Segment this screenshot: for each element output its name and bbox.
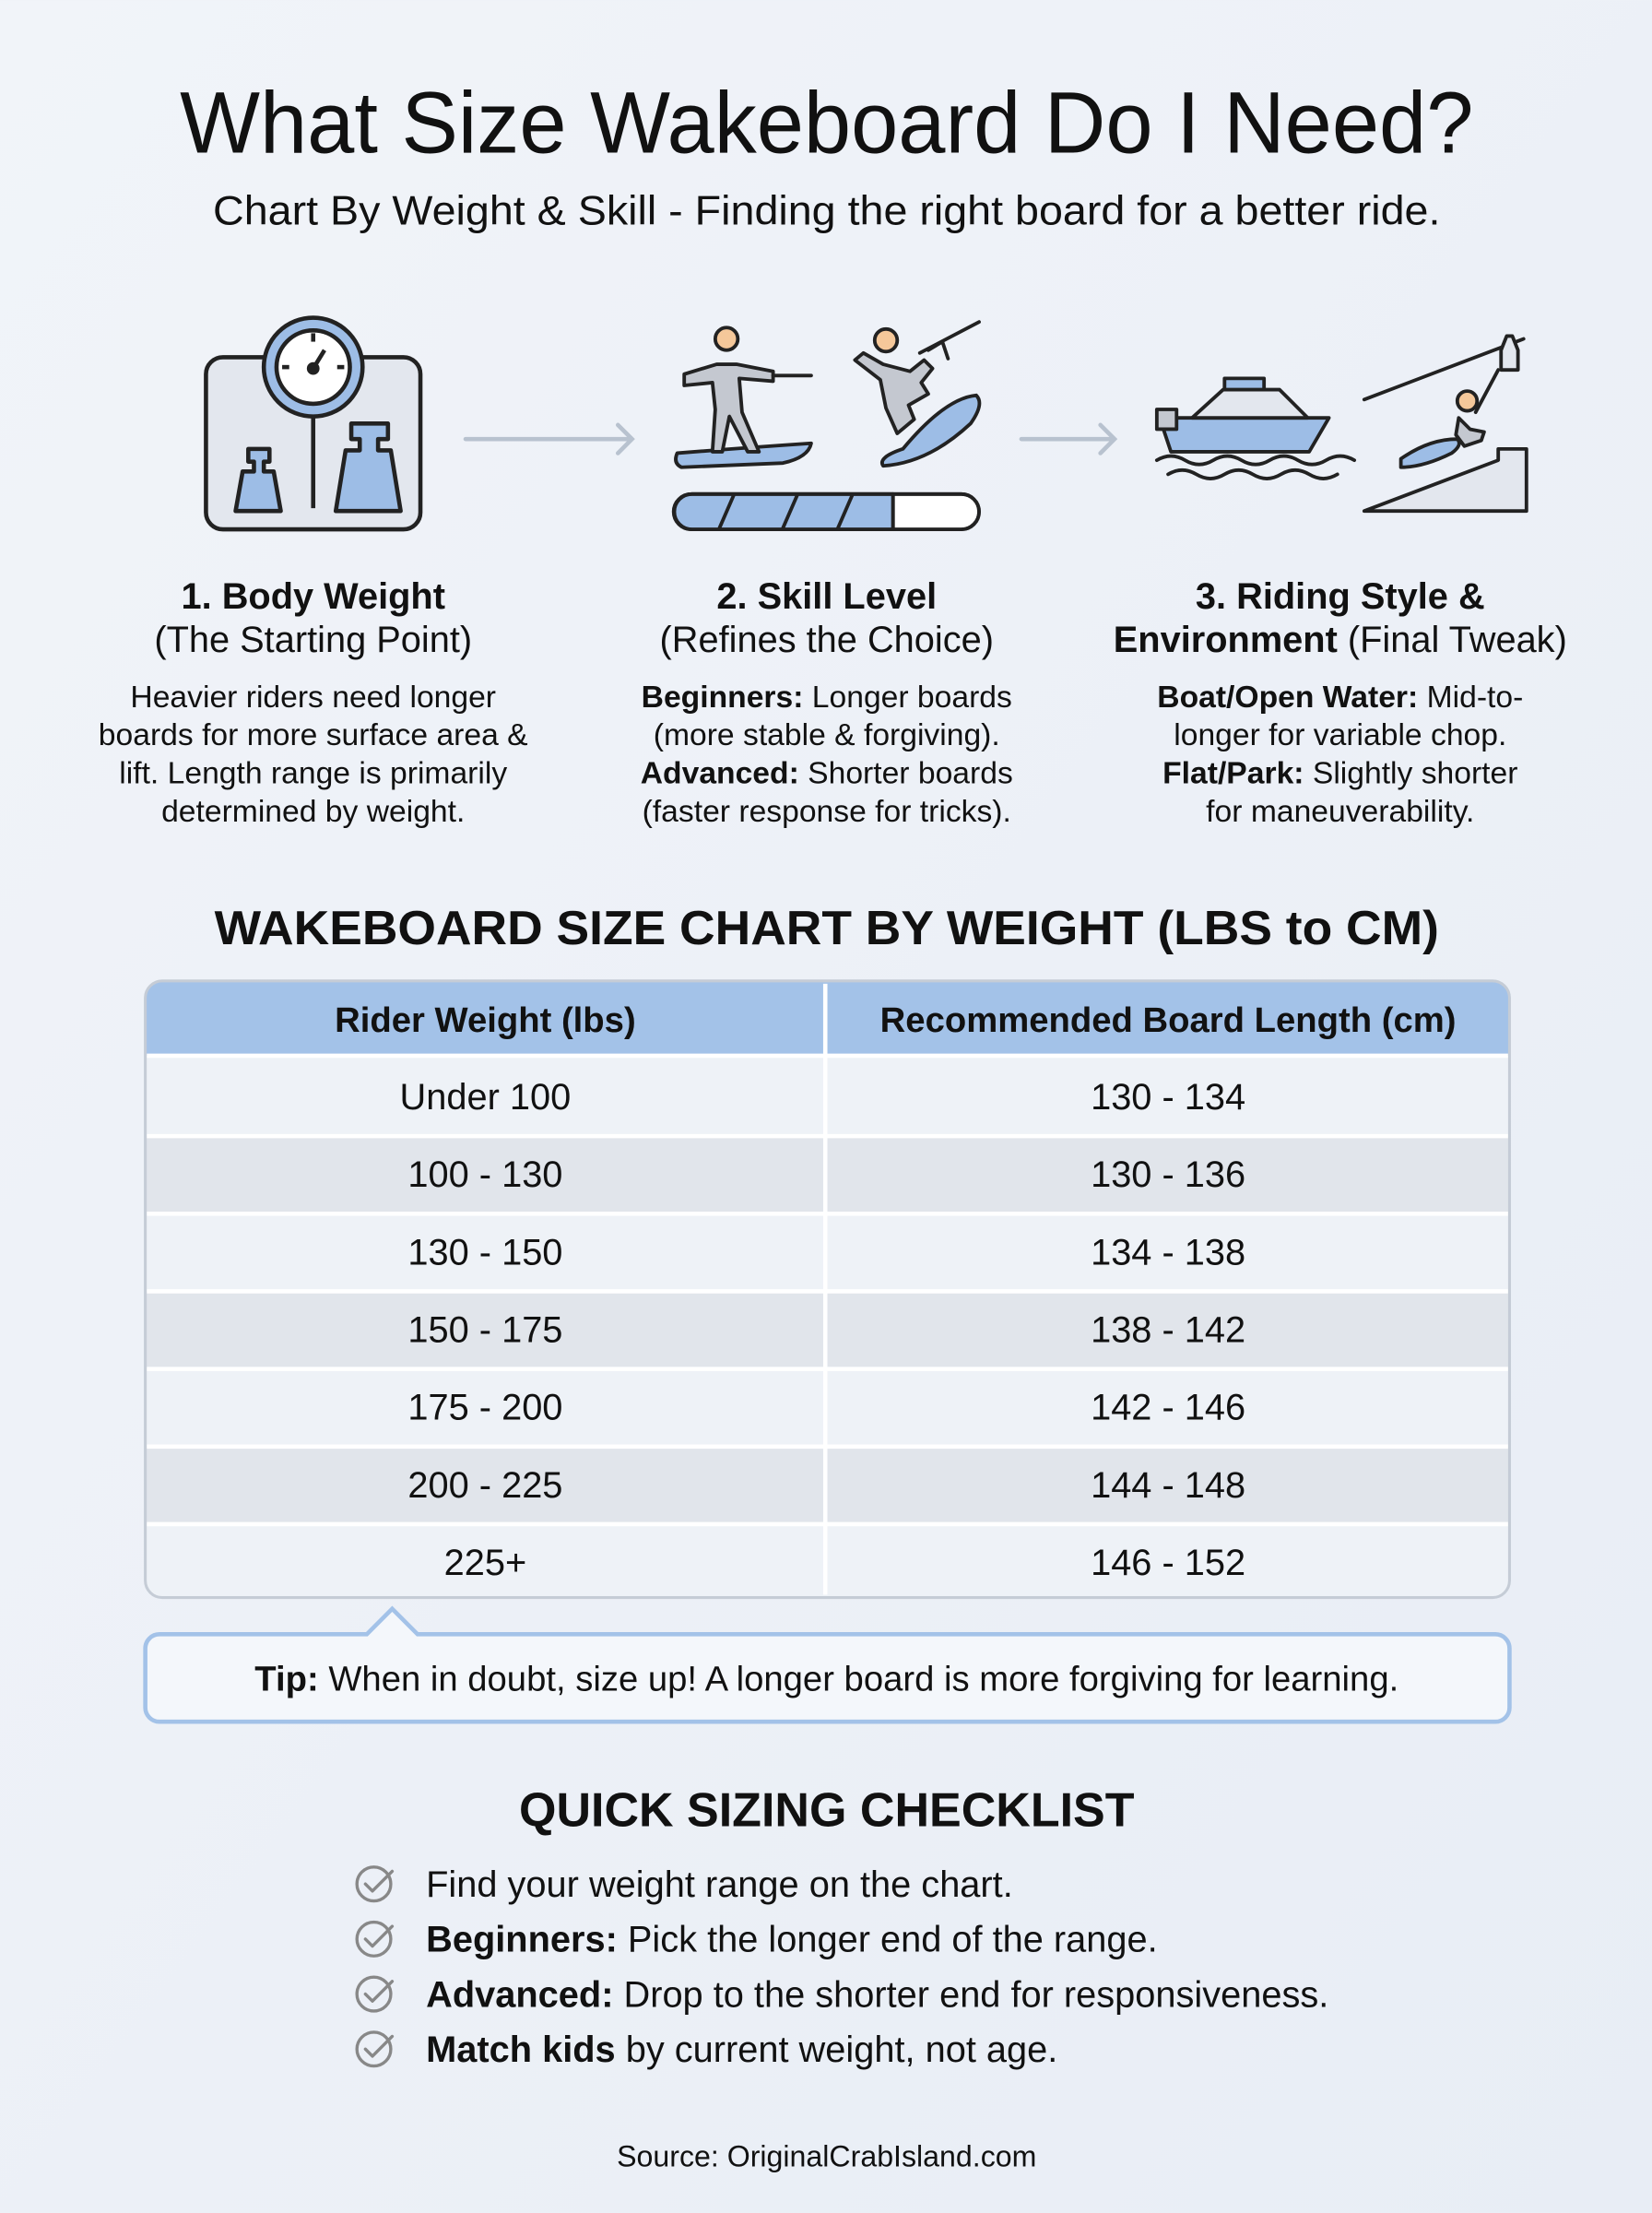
arrow 2 <box>1021 425 1115 453</box>
size chart table: 142 - 146 <box>1091 1388 1245 1428</box>
arrow 1 <box>466 425 632 453</box>
text: skill level column: (more stable & forgiving). <box>654 718 1000 752</box>
size chart table: 134 - 138 <box>1091 1232 1245 1272</box>
size chart table: 130 - 150 <box>407 1232 562 1272</box>
text: body weight column: boards for more surface area & <box>99 718 528 752</box>
text: riding style column: Environment (Final Tweak) <box>1114 620 1567 660</box>
size chart table: Rider Weight (lbs) <box>335 1000 636 1040</box>
size chart table: 130 - 134 <box>1091 1077 1245 1118</box>
text: skill level column: 2. Skill Level <box>716 576 937 617</box>
text: skill level column: Advanced: Shorter boards <box>641 757 1013 791</box>
size chart table <box>146 981 1509 1598</box>
checklist items <box>357 1864 1328 2070</box>
text: riding style column: for maneuverability. <box>1206 795 1474 829</box>
icon: boat and cable park <box>1157 336 1527 511</box>
size chart table: 146 - 152 <box>1091 1543 1245 1583</box>
chart heading: WAKEBOARD SIZE CHART BY WEIGHT (LBS to CM) <box>215 902 1439 955</box>
size chart table: 175 - 200 <box>407 1388 562 1428</box>
text: body weight column: lift. Length range is primarily <box>119 757 507 791</box>
checklist items: Find your weight range on the chart. <box>426 1864 1013 1905</box>
checklist heading: QUICK SIZING CHECKLIST <box>519 1783 1135 1837</box>
text: riding style column: Flat/Park: Slightly shorter <box>1162 757 1517 791</box>
text: body weight column: determined by weight. <box>161 795 465 829</box>
size chart table: 200 - 225 <box>407 1465 562 1506</box>
text: skill level column: Beginners: Longer boards <box>642 680 1012 715</box>
title: What Size Wakeboard Do I Need? <box>180 75 1473 172</box>
icon: scale with weights <box>206 318 420 529</box>
text: body weight column: (The Starting Point) <box>154 620 472 660</box>
text: riding style column: Boat/Open Water: Mid-to- <box>1157 680 1523 715</box>
size chart table: Under 100 <box>400 1077 571 1118</box>
source: Source: OriginalCrabIsland.com <box>617 2139 1036 2172</box>
subtitle: Chart By Weight & Skill - Finding the right board for a better ride. <box>213 189 1440 234</box>
size chart table: 144 - 148 <box>1091 1465 1245 1506</box>
text: skill level column: (Refines the Choice) <box>660 620 994 660</box>
checklist items: Match kids by current weight, not age. <box>426 2030 1057 2070</box>
text: riding style column <box>1114 576 1567 829</box>
text: skill level column: (faster response for tricks). <box>643 795 1011 829</box>
text: body weight column: 1. Body Weight <box>181 576 445 617</box>
size chart table: 225+ <box>444 1543 526 1583</box>
tip callout <box>146 1609 1509 1722</box>
size chart table: 130 - 136 <box>1091 1154 1245 1195</box>
text: body weight column <box>99 576 528 829</box>
text: riding style column: 3. Riding Style & <box>1196 576 1485 617</box>
tip callout: Tip: When in doubt, size up! A longer board is more forgiving for learning. <box>254 1660 1398 1699</box>
text: riding style column: longer for variable chop. <box>1174 718 1506 752</box>
size chart table: 100 - 130 <box>407 1154 562 1195</box>
size chart table: 150 - 175 <box>407 1310 562 1351</box>
checklist items: Beginners: Pick the longer end of the range. <box>426 1920 1158 1960</box>
size chart table: 138 - 142 <box>1091 1310 1245 1351</box>
size chart table: Recommended Board Length (cm) <box>880 1000 1457 1040</box>
text: skill level column <box>641 576 1013 829</box>
text: body weight column: Heavier riders need longer <box>130 680 496 715</box>
checklist items: Advanced: Drop to the shorter end for responsiveness. <box>426 1974 1328 2015</box>
icon: skill riders and progress bar <box>674 322 979 529</box>
